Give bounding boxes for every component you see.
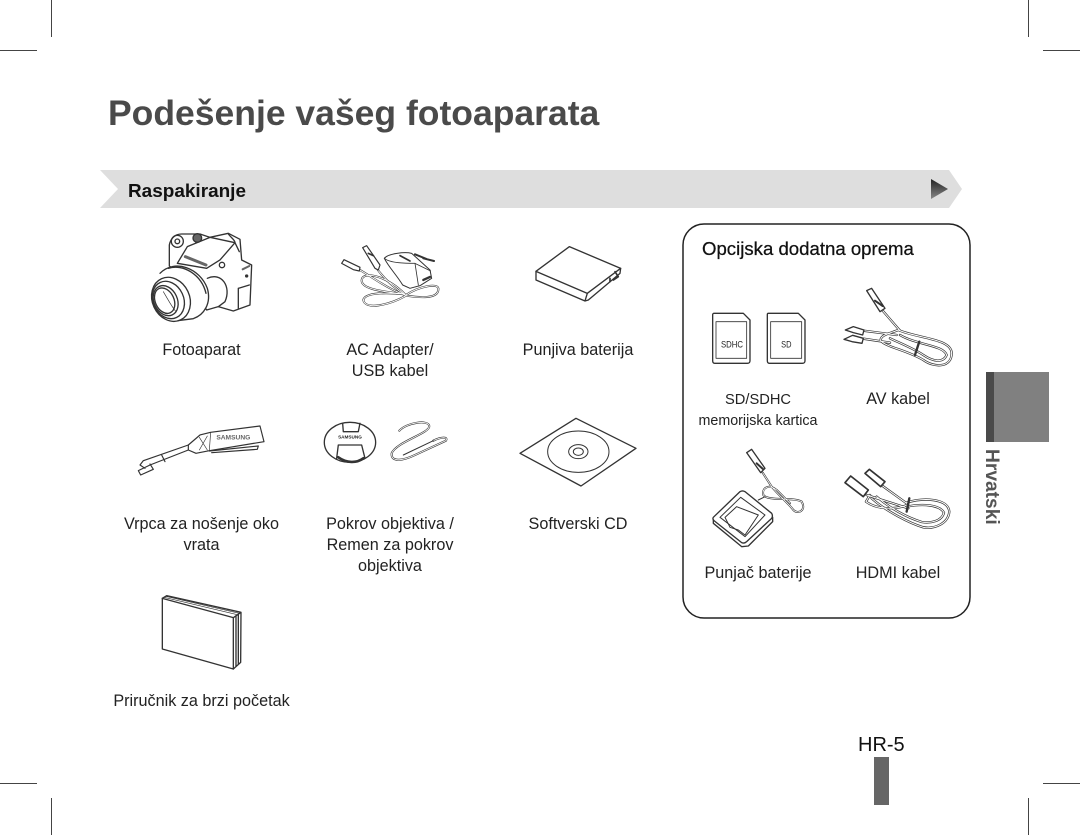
icon: software CD [520, 418, 636, 486]
icon: battery charger [713, 449, 803, 547]
icon: camera [144, 233, 252, 328]
icon: lens cap and strap: SAMSUNG [338, 435, 362, 440]
title: Podešenje vašeg fotoaparata [108, 93, 600, 133]
label: Punjiva baterija: Punjiva baterija [523, 341, 633, 359]
label: AV kabel: AV kabel [866, 390, 930, 408]
page marker bar [874, 757, 889, 805]
label: Fotoaparat: Fotoaparat [162, 341, 241, 359]
icon: lens cap and strap [324, 422, 446, 462]
icon: neck strap: SAMSUNG [216, 434, 250, 441]
icon: next arrow [931, 179, 948, 199]
page number: HR-5 [858, 734, 905, 756]
icon: battery [536, 247, 621, 301]
icon: AV cable [844, 288, 952, 365]
side tab: language marker [986, 372, 1049, 442]
icon: SD/SDHC cards: SD [781, 339, 792, 349]
side label: Hrvatski: Hrvatski [981, 449, 1002, 525]
icon: quick start manual [162, 596, 241, 669]
panel heading: Opcijska dodatna oprema [702, 238, 915, 259]
label: Vrpca za nošenje oko vrata: Vrpca za nošenje oko [124, 515, 279, 533]
section banner: Raspakiranje [100, 170, 962, 208]
icon: HDMI cable [845, 469, 949, 528]
icon: SD/SDHC cards: SDHC [721, 339, 743, 349]
label: Pokrov objektiva / Remen za pokrov objektiva: objektiva [358, 557, 422, 575]
icon: AC adapter and USB cable [342, 246, 438, 306]
label: AC Adapter / USB kabel: AC Adapter/ [346, 341, 434, 359]
label: Priručnik za brzi početak: Priručnik za brzi početak [113, 692, 291, 710]
label: Pokrov objektiva / Remen za pokrov objektiva: Pokrov objektiva / [326, 515, 454, 533]
label: Softverski CD: Softverski CD [529, 515, 627, 533]
icon: SD/SDHC cards [713, 313, 805, 363]
panel: optional accessories [683, 224, 970, 618]
section banner: Raspakiranje: Raspakiranje [128, 180, 246, 201]
icon: neck strap [138, 426, 264, 475]
panel: optional accessories: memorijska kartica [698, 412, 818, 429]
label: AC Adapter / USB kabel: USB kabel [352, 362, 428, 380]
label: Punjač baterije: Punjač baterije [704, 564, 812, 582]
label: Pokrov objektiva / Remen za pokrov objektiva: Remen za pokrov [327, 536, 454, 554]
label: HDMI kabel: HDMI kabel [856, 564, 940, 582]
label: SD/SDHC memorijska kartica: SD/SDHC [725, 391, 791, 408]
label: Vrpca za nošenje oko vrata: vrata [184, 536, 220, 554]
